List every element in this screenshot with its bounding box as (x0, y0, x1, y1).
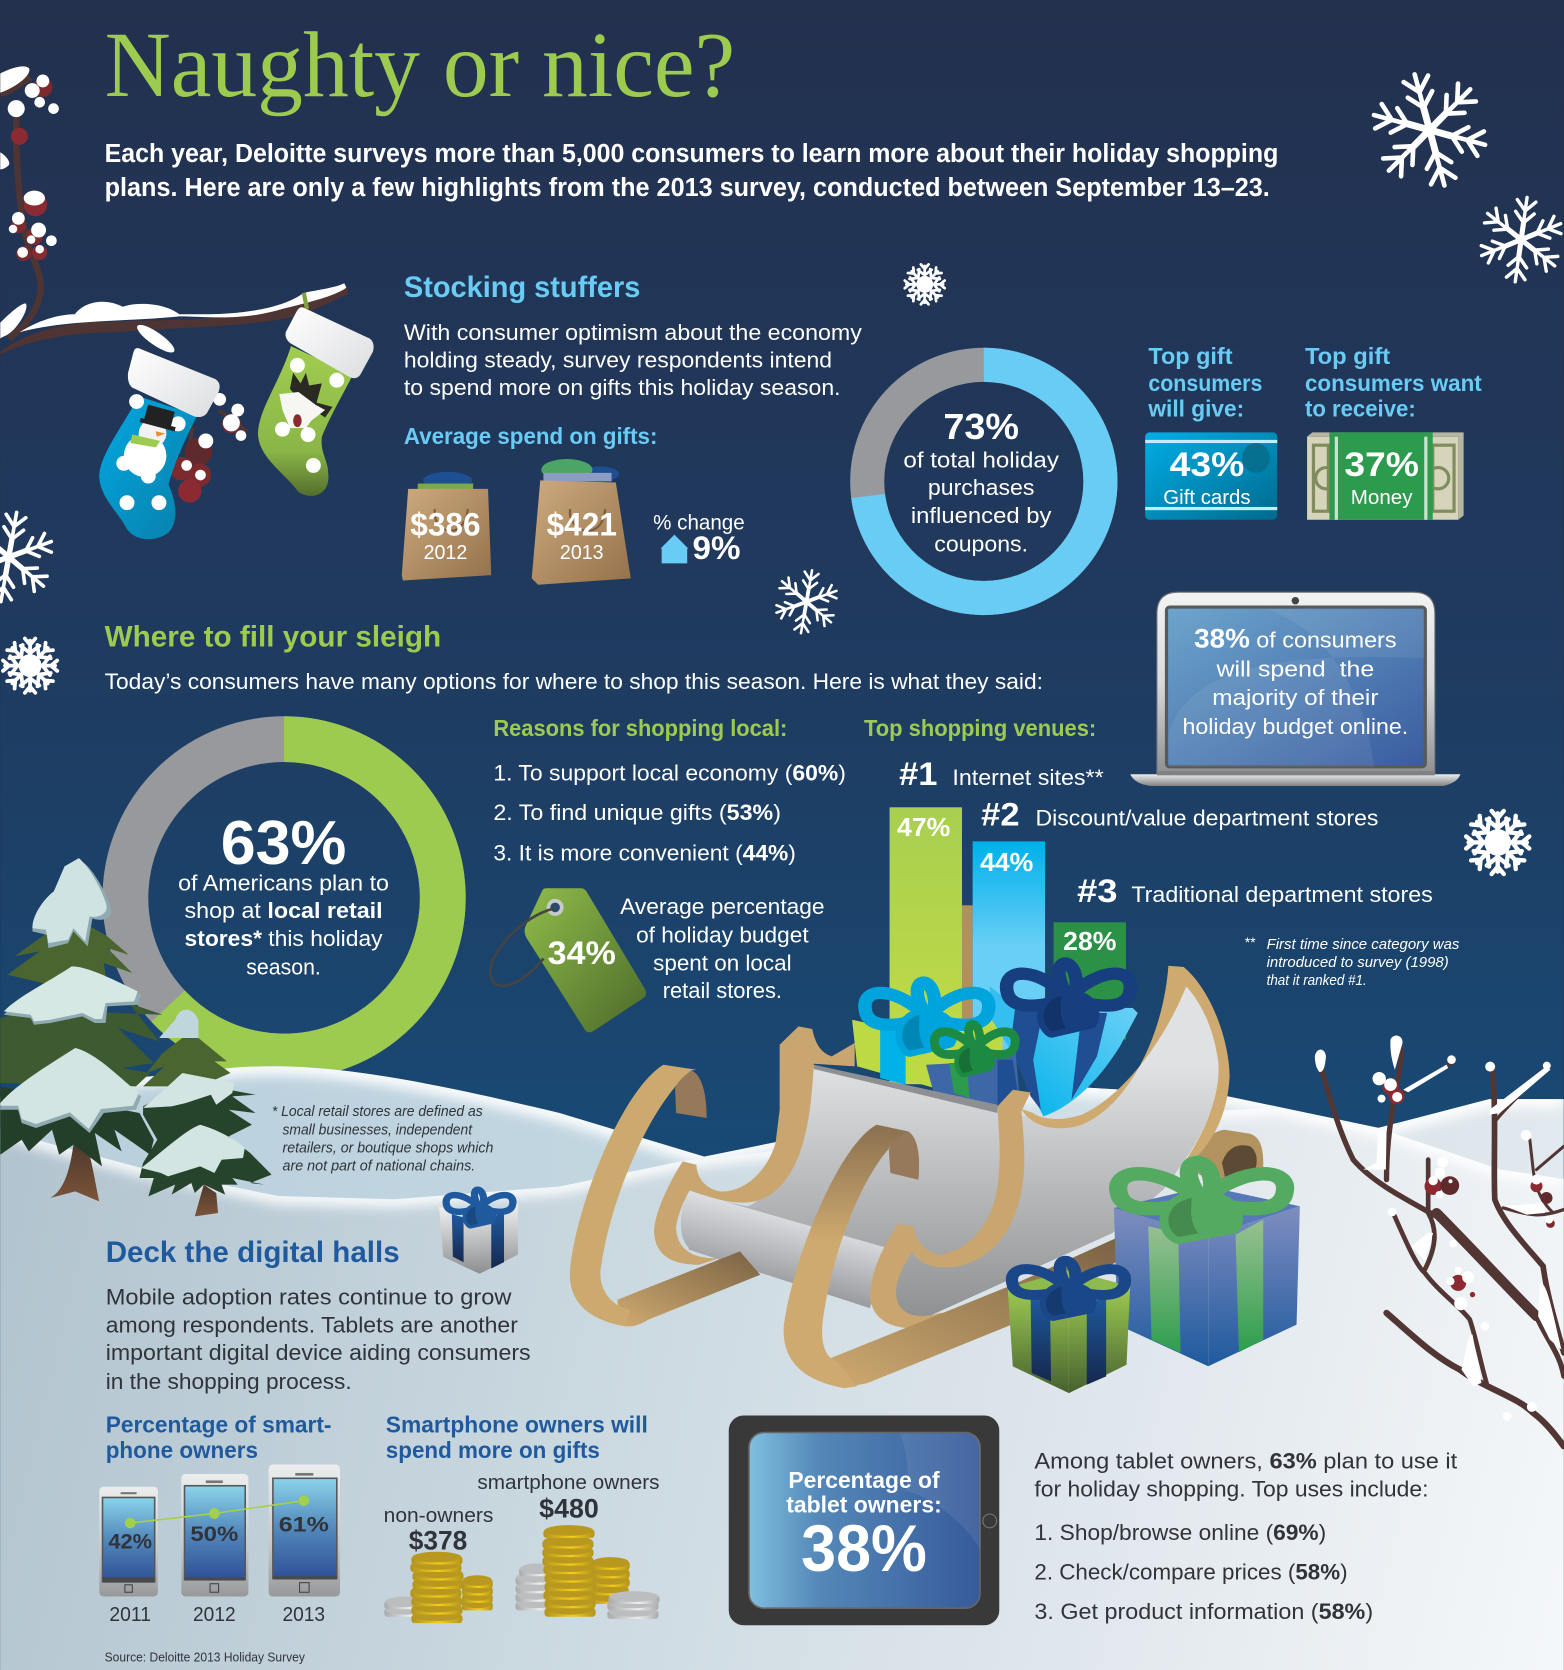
rear runner foot (617, 1251, 760, 1326)
panel: stocking stuffers text: With consumer optimism about the economy (404, 320, 863, 345)
icon: coins smartphone owners (516, 1525, 660, 1619)
panel: stocking stuffers text: to spend more on gifts this holiday season. (404, 375, 841, 400)
text: average percentage of budget: Average percentage (620, 894, 825, 919)
list: tablet uses: for holiday shopping. Top uses include: (1034, 1476, 1428, 1501)
list: top shopping venues labels: Traditional department stores (1131, 882, 1433, 907)
panel: stocking stuffers text: Stocking stuffers (404, 271, 640, 304)
intro text: Each year, Deloitte surveys more than 5,000 consumers to learn more about their holiday shopping (105, 140, 1278, 168)
stocking cuff: blue (128, 348, 220, 417)
heading: top gift to receive: consumers want (1305, 370, 1482, 396)
icon: tablet 38%: 38% (801, 1511, 927, 1585)
icon: tablet 38%: tablet owners: (786, 1491, 942, 1517)
icon: money stack 37% (1307, 432, 1464, 520)
phone 2013 (269, 1464, 340, 1597)
icon: gift card 43% (1145, 432, 1277, 520)
panel: smartphone owners chart: phone owners (106, 1437, 258, 1463)
phone 2012 (181, 1474, 248, 1597)
icon: price tag 34% (490, 888, 646, 1032)
panel: local retail donut chart (125, 739, 443, 1057)
bar chart: top shopping venues: 47% (897, 814, 951, 842)
icon: snowflakes (0, 60, 1564, 874)
icon: price tag 34%: 34% (548, 935, 616, 971)
callout: percent change: 9% (693, 530, 740, 566)
panel: smartphone owners spend: $378 (409, 1526, 467, 1556)
footnote: first time ranked: introduced to survey (1998) (1267, 955, 1449, 971)
donut text: 63% (178, 809, 389, 980)
text: average percentage of budget: of holiday budget (636, 923, 809, 948)
panel: where to fill your sleigh heading (105, 620, 1043, 694)
donut text: 63%: season. (246, 955, 321, 980)
icon: shopping bag 2012: 2012 (424, 542, 467, 564)
list: tablet uses: 1. Shop/browse online (69%) (1034, 1520, 1326, 1545)
icon: gift card 43%: 43% (1170, 446, 1244, 484)
panel: stocking stuffers text: Average spend on gifts: (404, 423, 657, 449)
footnote: local retail stores: small businesses, independent (282, 1122, 473, 1138)
footnote: first time ranked: First time since category was (1267, 937, 1459, 953)
front runner C (784, 1125, 908, 1388)
icon: money stack 37%: Money (1351, 487, 1413, 509)
illustration: berries near stockings (170, 393, 247, 503)
list: top shopping venues labels: #3 (1077, 873, 1117, 909)
bar chart: top shopping venues (890, 807, 1126, 1084)
front runner foot (827, 1236, 1120, 1388)
heading: top gift to give: Top gift (1148, 343, 1233, 369)
icon: shopping bag 2013: $421 (547, 507, 617, 543)
heading: top gift to give: will give: (1147, 395, 1244, 421)
icon: shopping bag 2013: 2013 (560, 542, 604, 564)
icon: laptop callout 38%: 38% of consumers (1194, 624, 1397, 654)
footnote: first time ranked: ** (1244, 934, 1256, 950)
rear runner C (570, 1065, 696, 1326)
bar chart: top shopping venues: 28% (1063, 928, 1117, 956)
icon: laptop callout 38%: will spend the (1215, 656, 1374, 681)
panel: smartphone owners chart: 61% (279, 1513, 329, 1537)
intro text (105, 140, 1278, 202)
icon: coins non-owners (384, 1552, 493, 1623)
panel: smartphone owners chart: 2012 (193, 1604, 236, 1626)
donut chart: coupons 73%: coupons. (934, 532, 1028, 557)
panel: smartphone owners spend: spend more on gifts (386, 1437, 600, 1463)
list: tablet uses: 3. Get product information ( 58%) (1034, 1599, 1373, 1624)
illustration: snowy pine trees (0, 858, 272, 1216)
donut text: 63%: 63% (221, 809, 346, 878)
panel: smartphone owners spend: Smartphone owners will (386, 1411, 648, 1437)
panel: smartphone owners spend: smartphone owners (477, 1471, 660, 1494)
icon: shopping bag 2013 (532, 459, 631, 585)
illustration: sleigh (570, 966, 1263, 1388)
illustration: bare branches with berries (1315, 1036, 1564, 1446)
list: top shopping venues labels: #1 (899, 756, 937, 792)
panel: deck the digital halls text: Mobile adoption rates continue to grow (106, 1285, 512, 1310)
panel: where to fill your sleigh heading: Where to fill your sleigh (105, 620, 441, 653)
icon: gift bows in sleigh (865, 963, 1130, 1073)
panel: deck the digital halls text (106, 1236, 531, 1394)
icon: laptop callout 38%: holiday budget online. (1182, 714, 1408, 739)
list: tablet uses (1034, 1449, 1458, 1624)
sleigh near S side (870, 1090, 1031, 1328)
icon: shopping bag 2012 (402, 472, 491, 580)
donut chart: coupons 73%: 73% (943, 406, 1019, 447)
icon: laptop callout 38%: majority of their (1212, 685, 1379, 710)
panel: smartphone owners spend (384, 1411, 660, 1623)
panel: deck the digital halls text: in the shopping process. (106, 1369, 352, 1394)
panel: smartphone owners chart: 2011 (109, 1604, 151, 1626)
panel: smartphone owners chart: Percentage of smart- (106, 1411, 331, 1437)
panel: smartphone owners chart: 2013 (282, 1604, 325, 1626)
panel: smartphone owners chart: 50% (190, 1522, 238, 1546)
icon: big blue gift with green ribbon (1114, 1186, 1300, 1366)
footnote: local retail stores: * Local retail stores are defined as (272, 1104, 483, 1120)
title: Naughty or nice? (105, 13, 735, 117)
list: reasons for shopping local: 3. It is more convenient (44%) (493, 841, 796, 866)
donut text: 63%: of Americans plan to (178, 870, 389, 895)
panel: deck the digital halls text: Deck the digital halls (106, 1236, 400, 1269)
donut chart: coupons 73%: purchases (928, 475, 1034, 500)
panel: stocking stuffers text: holding steady, survey respondents intend (404, 347, 832, 372)
text: average percentage of budget: spent on local (653, 950, 792, 975)
icon: tablet 38%: Percentage of (788, 1467, 940, 1493)
list: top shopping venues labels: Discount/value department stores (1035, 805, 1378, 830)
list: top shopping venues labels (864, 715, 1433, 909)
icon: green ribbon bow (1118, 1162, 1285, 1237)
text: average percentage of budget (620, 894, 825, 1003)
snow hills (0, 1066, 1564, 1670)
heading: top gift to give (1147, 343, 1262, 421)
panel: smartphone owners spend: $480 (539, 1494, 599, 1524)
icon: blue stocking with snowman (99, 348, 220, 539)
panel: where to fill your sleigh heading: Today’s consumers have many options for where to shop this season. Here is what they said: (105, 669, 1043, 694)
intro text: plans. Here are only a few highlights from the 2013 survey, conducted between September 13–23. (105, 174, 1270, 202)
panel: deck the digital halls text: among respondents. Tablets are another (106, 1312, 518, 1337)
sleigh high back (1021, 966, 1230, 1166)
panel: smartphone owners chart (99, 1411, 340, 1626)
icon: navy bow (1012, 1261, 1125, 1316)
sleigh seat panel (684, 986, 1220, 1317)
callout: percent change: % change (653, 510, 745, 534)
footnote: first time ranked: that it ranked #1. (1267, 973, 1367, 989)
list: top shopping venues labels: Top shopping venues: (864, 715, 1096, 741)
panel: stocking stuffers text (404, 271, 863, 449)
icon: small green gift with navy ribbon (1008, 1270, 1130, 1393)
footnote: local retail stores (272, 1104, 493, 1174)
bar chart: top shopping venues: 44% (980, 849, 1034, 877)
list: tablet uses: 2. Check/compare prices (58%) (1034, 1559, 1348, 1584)
trend line (125, 1495, 309, 1528)
illustration: gifts inside sleigh (852, 986, 1138, 1116)
footnote: first time ranked (1244, 934, 1459, 989)
panel: smartphone owners chart: 42% (108, 1530, 152, 1554)
list: reasons for shopping local: Reasons for shopping local: (493, 715, 787, 741)
list: tablet uses: Among tablet owners, 63% plan to use it (1034, 1449, 1458, 1474)
heading: top gift to give: consumers (1148, 370, 1262, 396)
donut chart: coupons 73%: influenced by (911, 503, 1052, 528)
stocking cuff: green (286, 307, 374, 378)
list: reasons for shopping local: 1. To support local economy ( 60%) (493, 761, 846, 786)
icon: laptop callout 38% (1130, 592, 1460, 786)
donut chart: coupons 73%: of total holiday (903, 448, 1060, 473)
icon: tablet 38% (729, 1415, 999, 1625)
sleigh far S side (654, 1026, 855, 1265)
donut text: 63%: shop at local retail (185, 898, 383, 923)
icon: shopping bag 2012: $386 (410, 507, 481, 543)
sleigh rear ring (1186, 1130, 1263, 1190)
icon: white gift with blue ribbon (439, 1190, 518, 1274)
callout: percent change (653, 510, 745, 566)
sleigh lower seat band (681, 1191, 888, 1308)
heading: top gift to receive (1305, 343, 1482, 421)
donut text: 63%: stores* this holiday (185, 926, 383, 951)
heading: top gift to receive: Top gift (1305, 343, 1390, 369)
list: top shopping venues labels: Internet sites** (952, 765, 1104, 790)
panel: deck the digital halls text: important digital device aiding consumers (106, 1340, 531, 1365)
phone 2011 (99, 1487, 158, 1597)
list: reasons for shopping local: 2. To find unique gifts ( 53%) (493, 800, 781, 825)
panel: smartphone owners spend: non-owners (384, 1504, 493, 1527)
list: reasons for shopping local (493, 715, 846, 866)
text: average percentage of budget: retail stores. (663, 978, 782, 1003)
icon: gift card 43%: Gift cards (1163, 487, 1251, 509)
list: top shopping venues labels: #2 (981, 796, 1020, 832)
donut chart: coupons 73% (867, 365, 1100, 598)
footnote: local retail stores: are not part of national chains. (282, 1158, 475, 1174)
icon: green stocking with reindeer (258, 293, 374, 496)
footnote: local retail stores: retailers, or boutique shops which (282, 1140, 493, 1156)
illustration: upper-left branch with berries (0, 66, 349, 357)
heading: top gift to receive: to receive: (1305, 395, 1416, 421)
icon: money stack 37%: 37% (1344, 446, 1419, 484)
text: source: Source: Deloitte 2013 Holiday Survey (105, 1649, 305, 1664)
